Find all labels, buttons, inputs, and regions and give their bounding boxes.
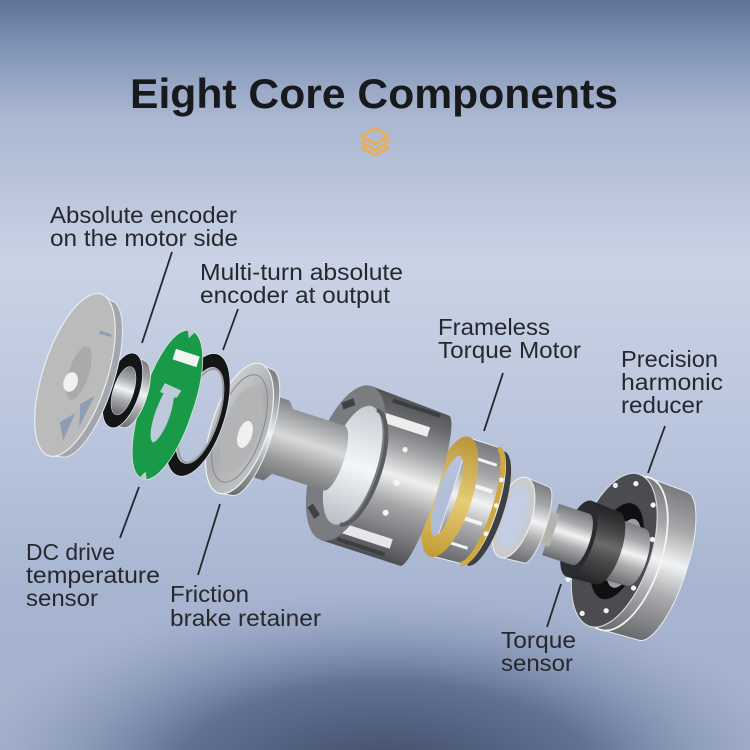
label: torque sensor: Torque — [501, 627, 576, 653]
label: DC drive temperature sensor: sensor — [26, 585, 98, 611]
label: frameless torque motor: Torque Motor — [438, 337, 581, 363]
label: precision harmonic reducer: harmonic — [621, 369, 723, 395]
motor side absolute encoder — [94, 348, 158, 435]
label: DC drive temperature sensor: temperature — [26, 562, 160, 588]
exploded actuator assembly — [18, 284, 712, 654]
label: precision harmonic reducer — [621, 346, 723, 418]
label: friction brake retainer — [170, 581, 321, 631]
motor housing — [290, 376, 462, 570]
label: frameless torque motor — [438, 314, 581, 363]
torque sensor — [529, 488, 633, 590]
gold ring — [409, 430, 490, 563]
label: DC drive temperature sensor: DC drive — [26, 539, 115, 565]
output shaft — [233, 391, 356, 502]
label: precision harmonic reducer: reducer — [621, 392, 703, 418]
icon: stacked layers — [362, 128, 388, 155]
label: multi-turn absolute encoder at output — [200, 259, 403, 308]
title: Eight Core Components — [130, 70, 618, 117]
rotor sleeve ring — [483, 472, 559, 568]
label: multi-turn absolute encoder at output: Multi-turn absolute — [200, 259, 403, 285]
label: DC drive temperature sensor — [26, 539, 160, 611]
frameless torque motor — [409, 430, 522, 574]
precision harmonic reducer — [554, 463, 710, 649]
label: torque sensor — [501, 627, 576, 676]
end plate — [18, 284, 138, 468]
label: absolute encoder on the motor side — [50, 202, 238, 251]
shaft flange — [192, 355, 292, 503]
label: frameless torque motor: Frameless — [438, 314, 550, 340]
multi-turn absolute encoder ring — [152, 346, 243, 484]
label: torque sensor: sensor — [501, 650, 573, 676]
reducer inner cylinder — [593, 516, 656, 591]
label: precision harmonic reducer: Precision — [621, 346, 718, 372]
label: multi-turn absolute encoder at output: encoder at output — [200, 282, 391, 308]
label: friction brake retainer: brake retainer — [170, 605, 321, 631]
label: friction brake retainer: Friction — [170, 581, 249, 607]
leader lines — [120, 252, 665, 627]
label: absolute encoder on the motor side: Absolute encoder — [50, 202, 237, 228]
green circuit board — [118, 323, 216, 487]
label: absolute encoder on the motor side: on the motor side — [50, 225, 238, 251]
